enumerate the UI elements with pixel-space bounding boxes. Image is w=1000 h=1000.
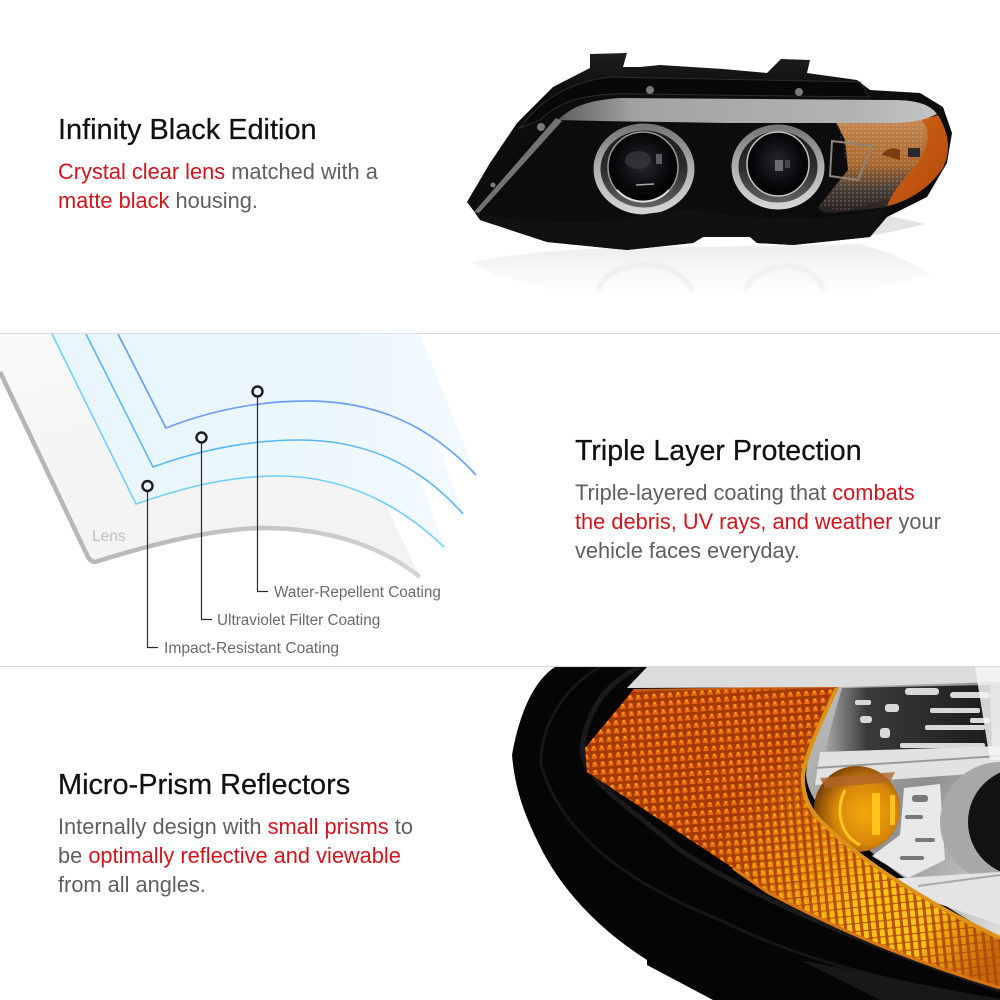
diagram: lens coating layers [0,334,476,657]
description text: Crystal clear lens matched with a [58,159,378,184]
amber trim [803,687,1000,938]
description text: from all angles. [58,872,206,897]
callout: ultraviolet filter coating: Ultraviolet Filter Coating [217,612,380,629]
heading and description: triple layer protection [575,435,941,563]
description text [58,159,378,213]
description text [575,480,941,563]
impact-resistant layer [52,334,444,547]
heading: Triple Layer Protection [575,435,862,467]
illustration: amber reflector close-up [512,667,1000,1000]
water-repellent layer [118,334,476,475]
screws [490,86,803,188]
lower housing [480,208,886,250]
callout: ultraviolet filter coating [196,432,380,629]
illustration: black headlight [467,53,952,290]
heading and description: micro-prism reflectors [58,769,413,897]
description text [58,814,413,897]
lens frame [474,118,562,213]
amber bulb [814,766,900,852]
turn signal [819,115,948,213]
callout: impact-resistant coating [142,481,339,657]
amber reflector prisms [585,687,1000,988]
light bar [558,98,937,123]
upper trim [520,77,870,128]
description text: the debris, UV rays, and weather your [575,509,941,534]
description text: Internally design with small prisms to [58,814,413,839]
callout: water-repellent coating: Water-Repellent Coating [274,584,441,601]
shadow [850,215,925,238]
description text: matte black housing. [58,188,258,213]
callout: water-repellent coating [252,386,441,601]
description text: vehicle faces everyday. [575,538,800,563]
panel: triple layer protection [0,333,1000,667]
left projector lens [597,127,691,211]
right projector lens [735,128,821,206]
chrome reflector [806,682,1000,938]
ultraviolet filter layer [86,334,463,514]
heading and description: infinity black edition [58,114,378,213]
panel: infinity black edition [58,53,952,290]
panel: micro-prism reflectors [58,667,1000,1000]
callout: impact-resistant coating: Impact-Resistant Coating [164,640,339,657]
black housing [500,667,1000,1000]
description text: be optimally reflective and viewable [58,843,401,868]
heading: Micro-Prism Reflectors [58,769,350,801]
description text: Triple-layered coating that combats [575,480,915,505]
reflection under headlight [472,244,932,297]
heading: Infinity Black Edition [58,114,317,146]
lens label: Lens [92,528,126,545]
lens layer [0,334,420,577]
housing contours [541,667,1000,1000]
white light bar [627,667,1000,688]
headlight housing [467,53,952,250]
